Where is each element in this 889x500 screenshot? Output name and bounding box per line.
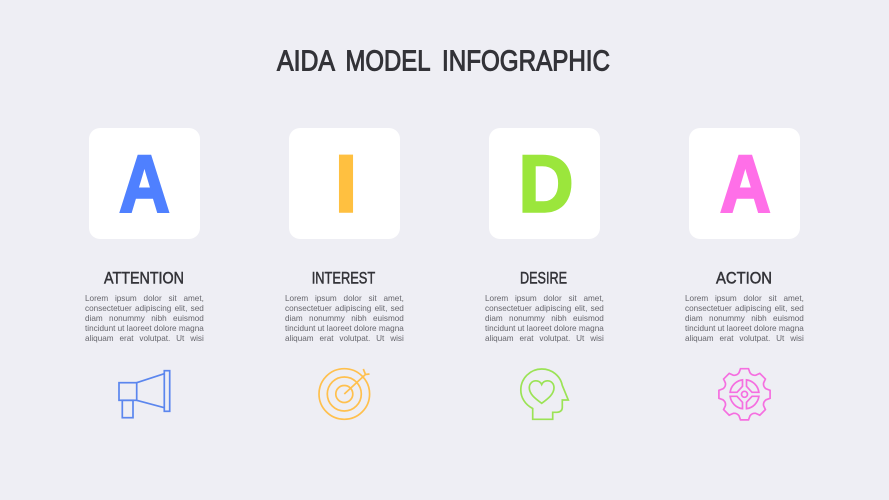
text block: desire: diam nonummy nibh euismod	[485, 314, 604, 323]
text block: attention: diam nonummy nibh euismod	[85, 314, 204, 323]
heading: attention: ATTENTION	[104, 270, 184, 288]
icon: head with heart	[521, 369, 568, 419]
letter card: I	[289, 128, 400, 239]
heading: desire: DESIRE	[520, 270, 567, 288]
panel: desire	[485, 128, 604, 419]
letter card: D: D	[519, 138, 573, 229]
letter card: A	[689, 128, 800, 239]
panel: action	[685, 128, 804, 420]
letter card: I: I	[335, 140, 357, 230]
text block: interest: tincidunt ut laoreet dolore magna	[285, 324, 404, 333]
heading: interest: INTEREST	[312, 270, 375, 288]
text block: desire: Lorem ipsum dolor sit amet,	[485, 294, 604, 303]
letter card: A: A	[720, 139, 771, 230]
title: AIDA	[277, 46, 335, 78]
text block: attention: Lorem ipsum dolor sit amet,	[85, 294, 204, 303]
text block: action: consectetuer adipiscing elit, sed	[685, 304, 804, 313]
title	[277, 46, 610, 78]
letter card: D	[489, 128, 600, 239]
text block: interest: consectetuer adipiscing elit, sed	[285, 304, 404, 313]
panel: interest	[285, 128, 404, 419]
title: MODEL	[346, 46, 430, 78]
text block: attention: tincidunt ut laoreet dolore magna	[85, 324, 204, 333]
text block: attention	[85, 294, 204, 343]
text block: attention: consectetuer adipiscing elit, sed	[85, 304, 204, 313]
title: INFOGRAPHIC	[442, 46, 610, 78]
text block: action: tincidunt ut laoreet dolore magna	[685, 324, 804, 333]
heading: action: ACTION	[716, 270, 772, 288]
text block: desire: tincidunt ut laoreet dolore magna	[485, 324, 604, 333]
text block: desire: aliquam erat volutpat. Ut wisi	[485, 334, 604, 343]
text block: interest: aliquam erat volutpat. Ut wisi	[285, 334, 404, 343]
text block: interest	[285, 294, 404, 343]
icon: megaphone	[119, 371, 170, 418]
text block: desire: consectetuer adipiscing elit, sed	[485, 304, 604, 313]
icon: gear	[719, 369, 770, 420]
panel: attention	[85, 128, 204, 418]
text block: interest: Lorem ipsum dolor sit amet,	[285, 294, 404, 303]
text block: action: Lorem ipsum dolor sit amet,	[685, 294, 804, 303]
text block: action: aliquam erat volutpat. Ut wisi	[685, 334, 804, 343]
letter card: A: A	[119, 139, 170, 230]
text block: action	[685, 294, 804, 343]
letter card: A	[89, 128, 200, 239]
text block: desire	[485, 294, 604, 343]
text block: interest: diam nonummy nibh euismod	[285, 314, 404, 323]
icon: target with arrow	[319, 369, 370, 419]
text block: action: diam nonummy nibh euismod	[685, 314, 804, 323]
text block: attention: aliquam erat volutpat. Ut wisi	[85, 334, 204, 343]
